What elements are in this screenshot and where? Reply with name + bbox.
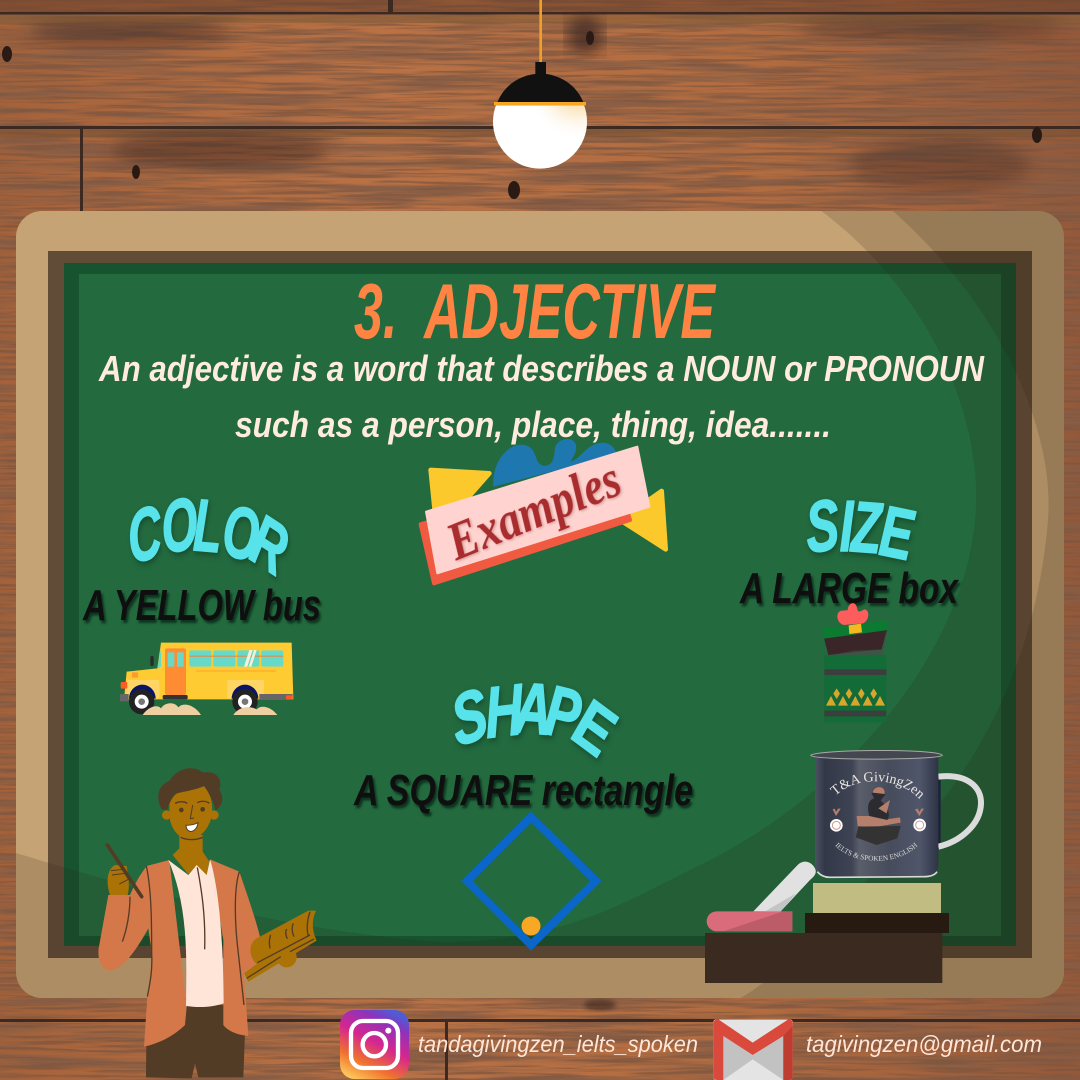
- icon: gmail: [713, 1019, 793, 1080]
- mug logo: IELTS & SPOKEN ENGLISH: [835, 842, 918, 861]
- illustration: mug and desk items: [705, 750, 984, 983]
- mug body: [815, 756, 938, 877]
- icon: pendant lamp: [493, 0, 587, 169]
- title: 3. ADJECTIVE: [354, 267, 716, 355]
- definition text: [98, 348, 985, 445]
- mug logo: [830, 772, 926, 861]
- icon: gift box: [822, 603, 888, 722]
- mug rim: [811, 750, 942, 759]
- desk box: [705, 933, 942, 983]
- heading: size: SIZE: [803, 484, 918, 577]
- dark book: [805, 913, 949, 933]
- panel: chalkboard: [0, 200, 1080, 1010]
- text: a large box: A LARGE box: [739, 564, 959, 613]
- mug handle: [931, 774, 981, 849]
- examples banner: Examples: [438, 450, 629, 572]
- text: a yellow bus: A YELLOW bus: [82, 581, 321, 630]
- text: email: tagivingzen@gmail.com: [806, 1031, 1042, 1057]
- eraser: [707, 911, 792, 931]
- chalk: [753, 862, 816, 911]
- definition text: such as a person, place, thing, idea.......: [235, 404, 831, 445]
- icon: blue diamond with dot: [467, 817, 596, 945]
- heading: color: COLOR: [124, 482, 294, 594]
- khaki book: [813, 883, 941, 913]
- icon: instagram: [340, 1010, 409, 1079]
- mug logo: T&A GivingZen: [830, 772, 923, 800]
- text: a square rectangle: A SQUARE rectangle: [353, 766, 693, 815]
- illustration: teacher: [98, 768, 317, 1078]
- icon: school bus: [120, 643, 293, 715]
- heading: shape: SHAPE: [445, 668, 624, 776]
- text: instagram handle: tandagivingzen_ielts_spoken: [418, 1031, 698, 1057]
